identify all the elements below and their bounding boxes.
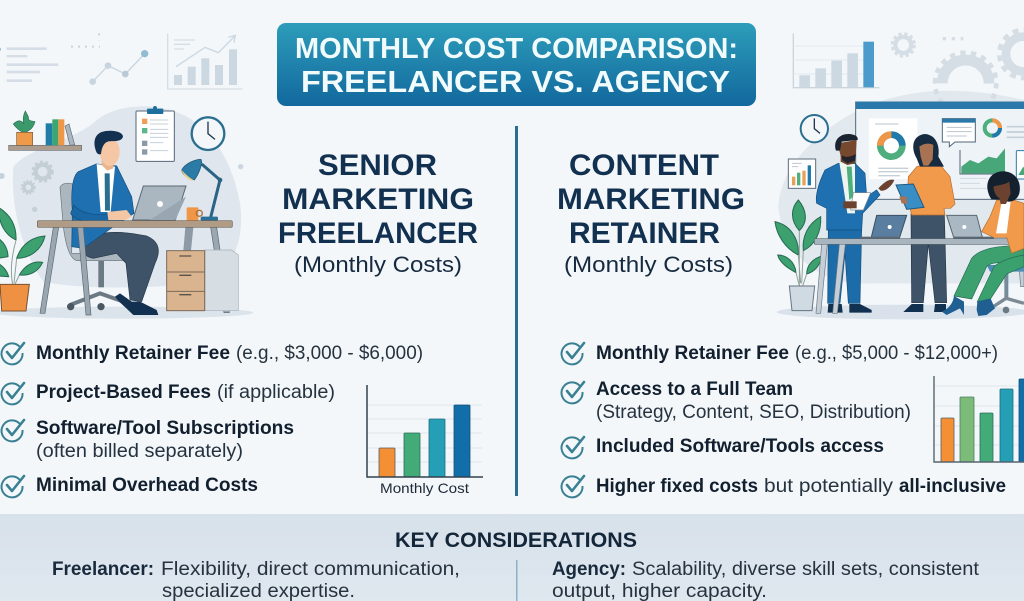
office chair bbox=[60, 183, 137, 310]
person: man in blue suit bbox=[816, 134, 894, 313]
item: monthly retainer fee bbox=[562, 343, 998, 364]
background blob bbox=[13, 106, 241, 287]
potted plant bbox=[0, 207, 45, 311]
background gears bbox=[892, 30, 1024, 114]
freelancer checklist bbox=[2, 343, 423, 497]
item: monthly retainer fee: Monthly Retainer Fee bbox=[596, 343, 789, 364]
item: higher fixed costs bbox=[562, 476, 1006, 497]
heading: agency column: MARKETING bbox=[557, 183, 745, 216]
background bar chart bbox=[793, 33, 879, 88]
heading: freelancer column bbox=[278, 149, 478, 277]
item: higher fixed costs: Higher fixed costs bbox=[596, 476, 758, 497]
title banner bbox=[277, 23, 756, 106]
freelancer consideration: Freelancer: bbox=[52, 559, 154, 580]
bar chart: freelancer monthly cost bbox=[367, 385, 483, 496]
item: included software: Included Software/Tools access bbox=[596, 436, 884, 457]
heading: freelancer column: FREELANCER bbox=[278, 217, 478, 250]
item: monthly retainer fee: (e.g., $5,000 - $12,000+) bbox=[795, 343, 998, 364]
key considerations band bbox=[0, 514, 1024, 601]
item: software subscriptions: Software/Tool Subscriptions bbox=[36, 418, 294, 439]
agency checklist bbox=[562, 343, 1006, 497]
wall clock bbox=[801, 115, 828, 142]
floor shadow bbox=[777, 305, 1024, 319]
heading: agency column: (Monthly Costs) bbox=[564, 252, 733, 277]
person: freelancer bbox=[71, 131, 158, 315]
heading: freelancer column: SENIOR bbox=[318, 149, 437, 182]
heading: agency column: RETAINER bbox=[569, 217, 720, 250]
heading: agency column: CONTENT bbox=[569, 149, 719, 182]
left illustration: freelancer at desk bbox=[0, 33, 253, 319]
presentation screen bbox=[856, 102, 1024, 199]
background document lines and charts bbox=[0, 33, 243, 89]
item: project-based fees: Project-Based Fees bbox=[36, 382, 211, 403]
center divider bbox=[515, 126, 518, 496]
item: monthly retainer fee: (e.g., $3,000 - $6,000) bbox=[236, 343, 423, 364]
heading: freelancer column: MARKETING bbox=[282, 183, 474, 216]
item: access to full team: (Strategy, Content, SEO, Distribution) bbox=[596, 402, 911, 423]
item: access to full team: Access to a Full Team bbox=[596, 379, 793, 400]
item: higher fixed costs: but potentially bbox=[764, 476, 894, 497]
desk lamp bbox=[182, 159, 222, 221]
decorative gears bbox=[22, 162, 53, 194]
laptop bbox=[133, 186, 186, 220]
right illustration: agency team bbox=[775, 30, 1024, 319]
title line 1: MONTHLY COST COMPARISON: bbox=[295, 33, 738, 65]
item: project-based fees bbox=[2, 382, 335, 404]
item: project-based fees: (if applicable) bbox=[217, 382, 335, 403]
item: higher fixed costs: all-inclusive bbox=[899, 476, 1006, 497]
small wall chart bbox=[788, 159, 816, 188]
chart label: Monthly Cost bbox=[380, 480, 469, 496]
person: woman in orange shirt bbox=[896, 134, 955, 312]
freelancer consideration bbox=[52, 559, 460, 601]
bar chart: agency monthly cost bbox=[934, 376, 1024, 462]
heading: agency column bbox=[557, 149, 745, 277]
agency consideration: Scalability, diverse skill sets, consistent bbox=[632, 559, 980, 580]
item: software subscriptions bbox=[2, 418, 294, 462]
agency consideration bbox=[552, 559, 980, 601]
freelancer consideration: Flexibility, direct communication, bbox=[161, 559, 460, 580]
item: software subscriptions: (often billed separately) bbox=[36, 441, 243, 462]
desk bbox=[37, 221, 238, 315]
item: access to full team bbox=[562, 379, 911, 423]
item: monthly retainer fee: Monthly Retainer Fee bbox=[36, 343, 230, 364]
heading: freelancer column: (Monthly Costs) bbox=[294, 252, 462, 277]
laptops on table bbox=[860, 215, 994, 239]
item: monthly retainer fee bbox=[2, 343, 423, 364]
person: seated woman bbox=[942, 171, 1024, 316]
floor shadow bbox=[0, 307, 253, 319]
agency consideration: Agency: bbox=[552, 559, 626, 580]
title line 2: FREELANCER VS. AGENCY bbox=[301, 64, 730, 99]
band heading: KEY CONSIDERATIONS bbox=[395, 529, 637, 552]
wall shelf with plant and books bbox=[9, 111, 82, 150]
table bbox=[814, 239, 1024, 313]
clipboard bbox=[136, 106, 174, 161]
wall clock bbox=[192, 117, 224, 150]
coffee mug bbox=[187, 207, 202, 221]
background blob bbox=[778, 91, 1024, 284]
item: minimal overhead: Minimal Overhead Costs bbox=[36, 475, 258, 496]
potted plant bbox=[775, 200, 822, 311]
